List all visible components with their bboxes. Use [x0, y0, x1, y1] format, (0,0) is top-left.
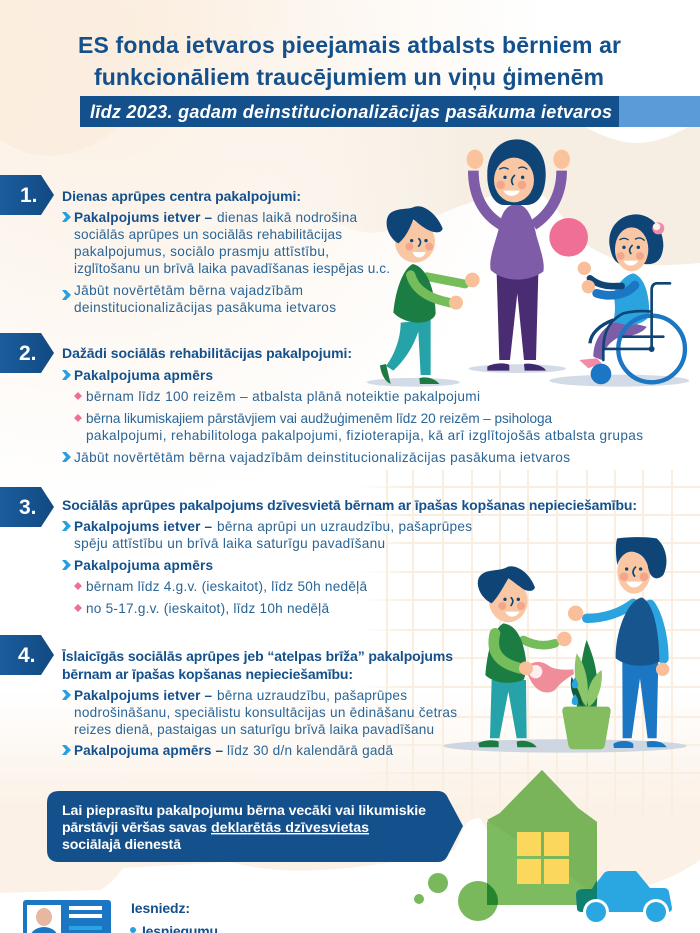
- chevrons 3: [62, 521, 71, 570]
- badge 2: [0, 333, 54, 373]
- text block 1: izglītošanu un brīvā laika pavadīšanas iespējas u.c.: [74, 261, 390, 276]
- badge 1: [0, 175, 54, 215]
- text block 4: [74, 688, 457, 758]
- text block 1: Jābūt novērtētām bērna vajadzībām: [74, 283, 303, 298]
- text block 2: [74, 368, 643, 465]
- ball: [549, 218, 588, 257]
- submission list: Iesniedz:: [131, 900, 190, 916]
- illustration: family with ball and wheelchair: [367, 139, 689, 387]
- heading 4: bērnam ar īpašas kopšanas nepieciešamību:: [62, 666, 353, 682]
- callout: pārstāvji vēršas savas: [62, 820, 207, 836]
- window: [517, 832, 569, 884]
- text block 3: [74, 519, 472, 616]
- callout: [47, 791, 463, 862]
- heading 3: Sociālās aprūpes pakalpojums dzīvesvietā bērnam ar īpašas kopšanas nepieciešamību:: [62, 497, 637, 513]
- callout: sociālajā dienestā: [62, 837, 181, 853]
- ground shadows: [367, 364, 689, 387]
- heading 4: [61, 648, 453, 682]
- woman: [467, 139, 570, 371]
- submission list: [130, 900, 218, 933]
- section 2: [0, 333, 643, 465]
- subtitle banner: līdz 2023. gadam deinstitucionalizācijas pasākuma ietvaros: [90, 102, 612, 122]
- badge 4: 4.: [18, 644, 36, 667]
- callout: Lai pieprasītu pakalpojumu bērna vecāki vai likumiskie: [62, 803, 426, 819]
- text block 3: bērna aprūpi un uzraudzību, pašaprūpes: [217, 519, 472, 534]
- house: [487, 770, 597, 905]
- title: funkcionāliem traucējumiem un viņu ģimenēm: [94, 64, 604, 90]
- callout: deklarētās dzīvesvietas: [211, 820, 369, 836]
- text block 1: dienas laikā nodrošina: [217, 210, 357, 225]
- plant in pot: [562, 640, 611, 749]
- text block 4: reizes dienā, pastaigas un saturīgu brīvā laika pavadīšanu: [74, 722, 434, 737]
- text block 2: pakalpojumi, rehabilitologa pakalpojumi, fizioterapija, kā arī izglītojošās atbalsta grupas: [86, 428, 643, 443]
- bushes: [414, 873, 498, 921]
- diamonds 2: [74, 392, 82, 422]
- car: [576, 871, 672, 925]
- text block 3: spēju attīstību un brīvā laika saturīgu pavadīšanu: [74, 536, 385, 551]
- badge 1: 1.: [20, 184, 38, 207]
- text block 1: [74, 210, 390, 315]
- text block 3: Pakalpojuma apmērs: [74, 558, 213, 573]
- text block 1: Pakalpojums ietver –: [74, 210, 212, 225]
- title: [78, 32, 621, 90]
- text block 3: bērnam līdz 4.g.v. (ieskaitot), līdz 50h nedēļā: [86, 579, 367, 594]
- text block 3: no 5-17.g.v. (ieskaitot), līdz 10h nedēļā: [86, 601, 329, 616]
- text block 2: Jābūt novērtētām bērna vajadzībām deinstitucionalizācijas pasākuma ietvaros: [74, 450, 570, 465]
- badge 3: [0, 487, 54, 527]
- text block 2: Pakalpojuma apmērs: [74, 368, 213, 383]
- text block 4: Pakalpojuma apmērs –: [74, 743, 223, 758]
- child with watering can: [478, 566, 574, 747]
- title: ES fonda ietvaros pieejamais atbalsts bērniem ar: [78, 32, 621, 58]
- icon: house with car and bushes: [414, 770, 672, 925]
- text block 3: Pakalpojums ietver –: [74, 519, 212, 534]
- section 3: [0, 487, 637, 616]
- chevrons 4: [62, 690, 71, 755]
- chevrons 1: [62, 212, 71, 300]
- section 1: [0, 175, 390, 315]
- heading 4: Īslaicīgās sociālās aprūpes jeb “atelpas brīža” pakalpojums: [61, 648, 453, 664]
- icon: ID card: [23, 900, 111, 933]
- section 4: [0, 635, 457, 758]
- text block 4: nodrošināšanu, speciālistu konsultācijas un ēdināšanu četras: [74, 705, 457, 720]
- text block 2: bērna likumiskajiem pārstāvjiem vai audžuģimenēm līdz 20 reizēm – psihologa: [86, 411, 552, 426]
- adult: [568, 537, 669, 748]
- girl in wheelchair: [578, 214, 685, 384]
- text block 2: bērnam līdz 100 reizēm – atbalsta plānā noteiktie pakalpojumi: [86, 389, 480, 404]
- boy: [380, 206, 480, 384]
- heading 1: Dienas aprūpes centra pakalpojumi:: [62, 188, 301, 204]
- text block 4: bērna uzraudzību, pašaprūpes: [217, 688, 407, 703]
- text block 1: deinstitucionalizācijas pasākuma ietvaros: [74, 300, 336, 315]
- heading 2: Dažādi sociālās rehabilitācijas pakalpojumi:: [62, 345, 352, 361]
- diamonds 3: [74, 582, 82, 612]
- subtitle banner: [80, 96, 700, 127]
- text block 1: sociālās aprūpes un sociālās rehabilitācijas: [74, 227, 342, 242]
- text block 1: pakalpojumus, sociālo prasmju attīstību,: [74, 244, 329, 259]
- badge 4: [0, 635, 54, 675]
- text block 4: līdz 30 d/n kalendārā gadā: [227, 743, 393, 758]
- badge 2: 2.: [19, 342, 37, 365]
- illustration: children watering plant: [443, 537, 687, 753]
- chevrons 2: [62, 370, 71, 462]
- ground shadow: [443, 739, 687, 753]
- text block 4: Pakalpojums ietver –: [74, 688, 212, 703]
- badge 3: 3.: [19, 496, 37, 519]
